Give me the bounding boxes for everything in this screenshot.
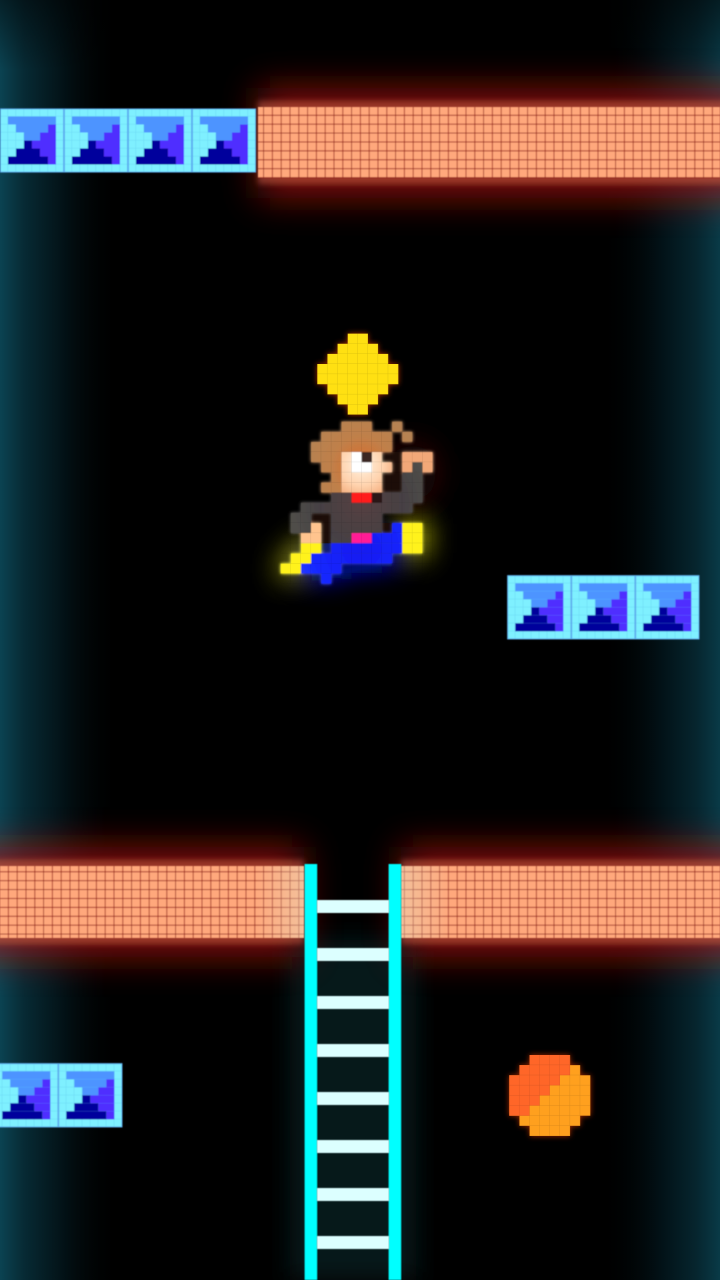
character face (341, 452, 392, 493)
character jumping (281, 422, 437, 584)
character body (281, 422, 433, 584)
icon: yellow diamond gem (317, 334, 398, 415)
character trousers (301, 523, 402, 584)
top-left block row (0, 108, 256, 172)
top brick platform (258, 88, 720, 198)
character hand (402, 452, 433, 472)
lower-left brick platform (0, 847, 304, 957)
icon: orange ball (509, 1055, 590, 1136)
bottom-left block row (0, 1063, 122, 1127)
ladder right rail (389, 864, 401, 1280)
character red scarf (352, 493, 382, 503)
character hair (311, 422, 412, 493)
ladder ambient glow (290, 940, 416, 1280)
character eye (352, 452, 372, 472)
character glow: trousers (301, 543, 402, 574)
ladder (305, 864, 317, 1280)
character pink belt (352, 533, 372, 543)
character yellow boots (281, 523, 422, 574)
character shirt (291, 462, 422, 543)
character dark sleeve shadow (311, 452, 402, 543)
ladder left rail (305, 864, 317, 1280)
right block row (507, 575, 699, 639)
character pixel grid (281, 422, 433, 584)
top vignette (0, 0, 720, 70)
ladder rungs (317, 900, 389, 1249)
lower-right brick platform (401, 847, 720, 957)
left edge teal glow (0, 0, 120, 1280)
right edge teal glow (600, 0, 720, 1280)
character glow: head (388, 444, 437, 501)
character glow: shoes (281, 523, 422, 574)
character lower hand (301, 523, 321, 543)
